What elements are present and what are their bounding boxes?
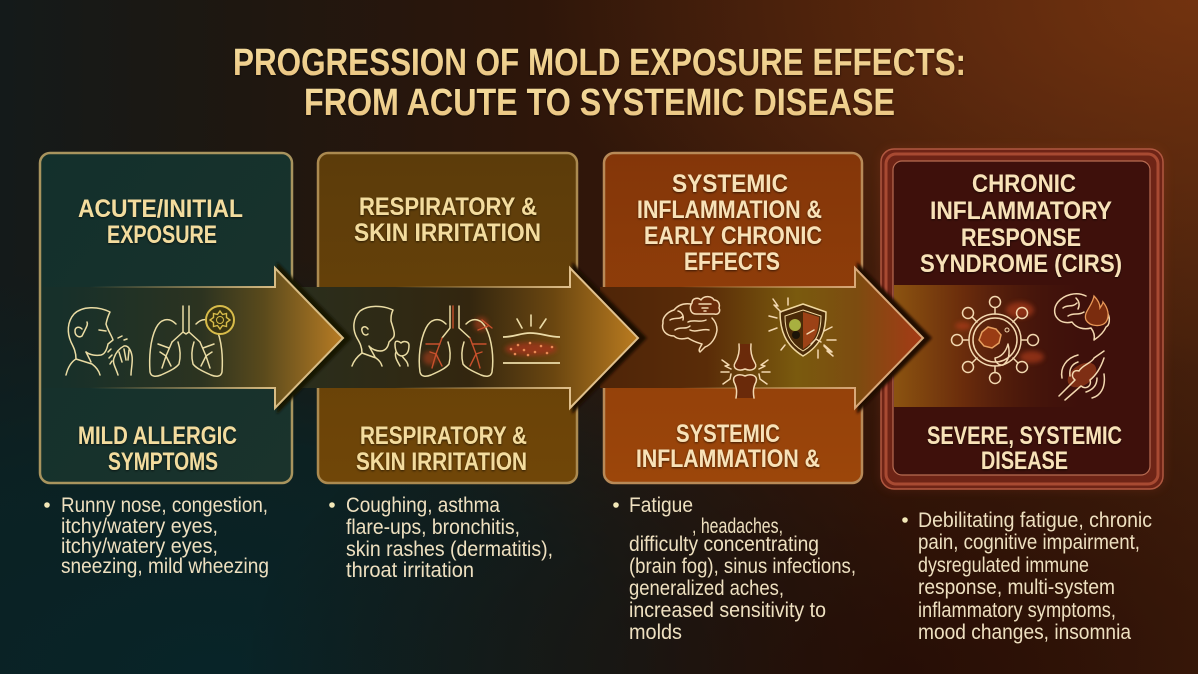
panel 1 subheading: MILD ALLERGIC — [78, 422, 237, 450]
panel 4 heading: CHRONIC — [972, 170, 1076, 198]
text block: CIRS symptoms: response, multi-system — [918, 576, 1115, 599]
panel 3 subheading: SYSTEMIC — [676, 420, 780, 448]
icon: inflammatory cell — [952, 296, 1044, 384]
icon: inflamed brain — [1055, 294, 1109, 340]
text block: respiratory and skin symptoms: skin rashes (dermatitis), — [346, 538, 553, 561]
panel 4 subheading: SEVERE, SYSTEMIC — [927, 422, 1122, 450]
text block: mild allergic symptoms: sneezing, mild wheezing — [61, 555, 269, 578]
title: PROGRESSION OF MOLD EXPOSURE EFFECTS: — [233, 42, 966, 84]
text block: systemic symptoms: generalized aches, — [629, 577, 784, 600]
panel 3 heading: SYSTEMIC — [672, 170, 788, 198]
text block: respiratory and skin symptoms: throat irritation — [346, 559, 474, 582]
icon: person coughing into fist — [352, 306, 409, 366]
title: FROM ACUTE TO SYSTEMIC DISEASE — [304, 82, 895, 124]
icon: cracked shield — [769, 298, 836, 358]
panel: respiratory and skin irritation — [318, 153, 577, 483]
text block: systemic symptoms — [613, 494, 856, 644]
panel 3 heading: EARLY CHRONIC — [644, 222, 822, 250]
text block: mild allergic symptoms — [44, 494, 269, 578]
text block: systemic symptoms: Fatigue — [629, 494, 693, 517]
text block: CIRS symptoms — [902, 509, 1152, 644]
text block: respiratory and skin symptoms: Coughing, asthma — [346, 494, 500, 517]
icon: inflamed joint — [1059, 351, 1104, 400]
text block: systemic symptoms: , headaches, — [692, 515, 783, 538]
panel 1 heading: EXPOSURE — [107, 221, 217, 249]
text block: mild allergic symptoms: itchy/watery eyes, — [61, 535, 218, 558]
text block: CIRS symptoms: inflammatory symptoms, — [918, 599, 1116, 622]
panel 1 heading — [78, 195, 243, 249]
panel 3 heading: INFLAMMATION & — [637, 196, 822, 224]
panel: CIRS — [880, 148, 1165, 490]
icon: painful joint — [721, 344, 770, 398]
arrow 1 — [42, 262, 352, 414]
text block: mild allergic symptoms: Runny nose, congestion, — [61, 494, 268, 517]
text block: CIRS symptoms: dysregulated immune — [918, 554, 1089, 577]
panel 3 heading — [637, 170, 822, 276]
panel 2 heading — [354, 193, 541, 247]
text block: systemic symptoms: (brain fog), sinus infections, — [629, 555, 856, 578]
panel 4 heading: RESPONSE — [961, 224, 1081, 252]
band behind CIRS icons — [894, 285, 1099, 407]
panel 2 subheading: SKIN IRRITATION — [356, 448, 527, 476]
panel 1 subheading — [78, 422, 237, 476]
text block: CIRS symptoms: pain, cognitive impairment, — [918, 531, 1140, 554]
panel 2 heading: RESPIRATORY & — [359, 193, 537, 221]
icon: brain fog — [663, 297, 720, 352]
icon: lungs with mold spore — [150, 306, 234, 376]
panel 4 heading — [920, 170, 1122, 278]
icon: skin rash — [503, 315, 560, 363]
panel 1 subheading: SYMPTOMS — [108, 448, 218, 476]
panel: acute initial exposure — [40, 153, 292, 483]
panel 4 subheading — [927, 422, 1122, 475]
panel 3 subheading: INFLAMMATION & — [636, 445, 820, 473]
panel 3 subheading — [636, 420, 820, 473]
text block: systemic symptoms: increased sensitivity to — [629, 599, 826, 622]
icon: coughing person — [66, 308, 132, 375]
arrow 2 — [296, 262, 647, 414]
text block: systemic symptoms: molds — [629, 621, 682, 644]
panel 3 heading: EFFECTS — [684, 248, 780, 276]
panel 2 heading: SKIN IRRITATION — [354, 219, 541, 247]
panel 2 subheading: RESPIRATORY & — [360, 422, 527, 450]
text block: respiratory and skin symptoms: flare-ups, bronchitis, — [346, 516, 520, 539]
title — [233, 42, 966, 124]
panel 1 heading: ACUTE/INITIAL — [78, 195, 243, 223]
text block: respiratory and skin symptoms — [329, 494, 553, 582]
arrow 3 — [600, 262, 932, 414]
text block: systemic symptoms: difficulty concentrating — [629, 533, 819, 556]
panel: systemic inflammation — [604, 153, 862, 483]
panel 2 subheading — [356, 422, 527, 476]
text block: mild allergic symptoms: itchy/watery eyes, — [61, 515, 218, 538]
icon: irritated lungs — [419, 306, 493, 376]
text block: CIRS symptoms: Debilitating fatigue, chronic — [918, 509, 1152, 532]
text block: CIRS symptoms: mood changes, insomnia — [918, 621, 1131, 644]
panel 4 heading: INFLAMMATORY — [930, 197, 1112, 225]
panel 4 subheading: DISEASE — [981, 447, 1068, 475]
panel 4 heading: SYNDROME (CIRS) — [920, 250, 1122, 278]
